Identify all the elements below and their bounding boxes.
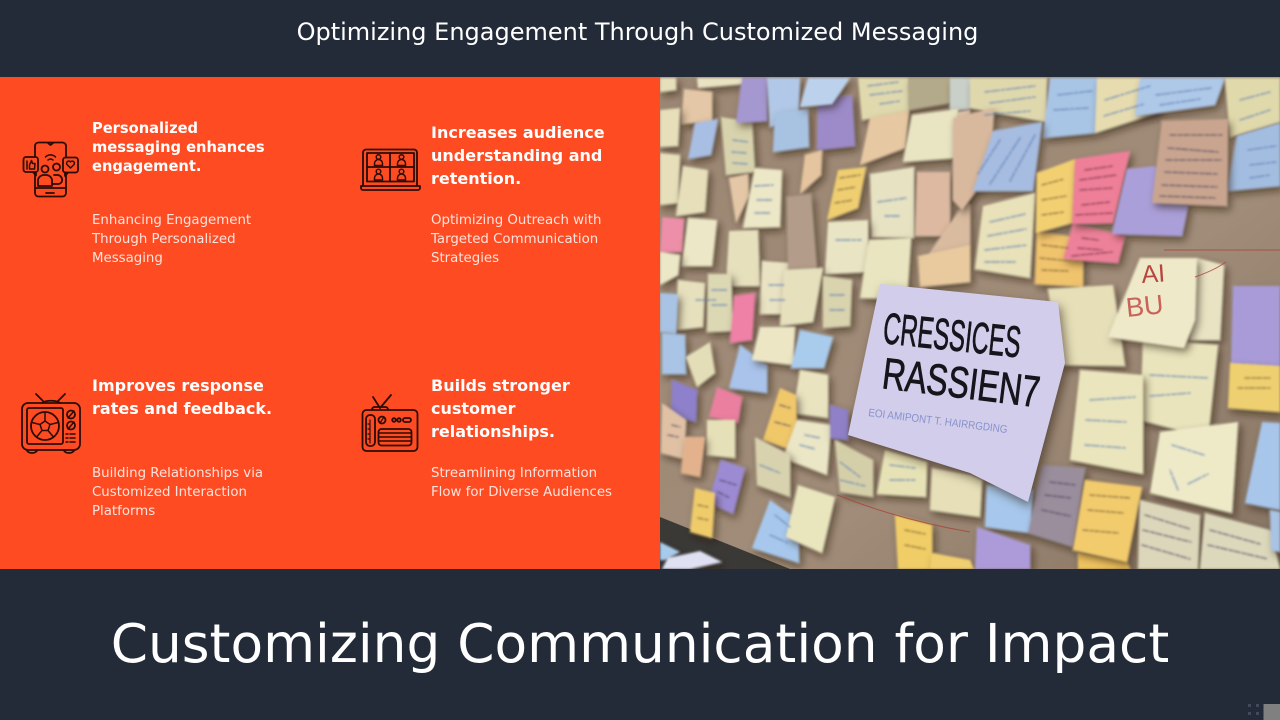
benefit heading: customer relationships: Builds stronger	[431, 376, 570, 395]
red string lines	[837, 250, 1280, 532]
red handwriting note: BU	[1124, 289, 1165, 323]
panel: orange benefits	[0, 77, 660, 569]
benefit text: response rates	[92, 466, 263, 519]
red handwriting note: AI	[1140, 259, 1166, 289]
benefit text: audience understanding: Targeted Communication	[431, 232, 598, 247]
icon: radio with antenna	[362, 394, 418, 452]
benefit heading: personalized messaging: messaging enhances	[92, 139, 265, 156]
wall background	[660, 77, 1280, 569]
central sign: CRESSICES	[881, 304, 1023, 367]
benefit heading: response rates: Improves response	[92, 376, 264, 395]
bottom band	[0, 569, 1280, 720]
benefit text: response rates: Platforms	[92, 504, 155, 519]
photo: wall of sticky notes	[660, 77, 1280, 569]
benefit heading: audience understanding: understanding and	[431, 146, 602, 165]
benefit text: personalized messaging: Messaging	[92, 251, 163, 266]
floor and desk corner	[660, 517, 790, 569]
top centre notes	[736, 78, 970, 328]
main title: Customizing Communication for Impact	[111, 612, 1169, 675]
header title: Optimizing Engagement Through Customized Messaging	[297, 18, 978, 46]
red handwriting note	[1124, 259, 1166, 323]
top right notes	[953, 78, 1280, 366]
benefit heading: audience understanding	[431, 123, 605, 188]
benefit heading: customer relationships: customer	[431, 399, 515, 418]
centre-left lower notes	[660, 327, 982, 569]
benefit text: customer relationships	[431, 466, 612, 500]
top header band	[0, 0, 1280, 77]
icon: phone with social reactions	[22, 142, 79, 198]
benefit text: personalized messaging	[92, 213, 251, 266]
benefit heading: personalized messaging	[92, 120, 265, 175]
central sign: EOI AMIPONT T. HAIRRGDING	[868, 407, 1008, 436]
icon: television with football	[21, 393, 81, 454]
benefit text: response rates: Building Relationships via	[92, 466, 263, 481]
benefit text: audience understanding	[430, 213, 601, 266]
right lower notes	[975, 258, 1280, 569]
benefit heading: audience understanding: Increases audience	[431, 123, 605, 142]
icon: laptop with video call grid	[360, 148, 421, 191]
central sign	[848, 284, 1065, 502]
benefit heading: customer relationships	[431, 376, 570, 441]
benefit heading: customer relationships: relationships.	[431, 422, 555, 441]
benefit text: response rates: Customized Interaction	[92, 485, 247, 500]
handwriting scribbles on notes	[668, 82, 1276, 559]
benefit heading: personalized messaging: engagement.	[92, 158, 201, 175]
corner widget	[1248, 704, 1280, 720]
benefit text: personalized messaging: Through Personalized	[92, 232, 236, 247]
upper-left notes	[660, 78, 790, 343]
central sign: RASSIEN7	[880, 349, 1043, 417]
benefit text: customer relationships: Streamlining Information	[431, 466, 597, 481]
benefit text: audience understanding: Strategies	[431, 251, 499, 266]
benefit text: audience understanding: Optimizing Outreach with	[431, 213, 601, 228]
benefit heading: personalized messaging: Personalized	[92, 120, 198, 137]
benefit text: customer relationships: Flow for Diverse Audiences	[431, 485, 612, 500]
benefit heading: response rates: rates and feedback.	[92, 399, 272, 418]
benefit heading: response rates	[92, 376, 272, 418]
benefit heading: audience understanding: retention.	[431, 169, 521, 188]
benefit text: personalized messaging: Enhancing Engagement	[92, 213, 251, 228]
